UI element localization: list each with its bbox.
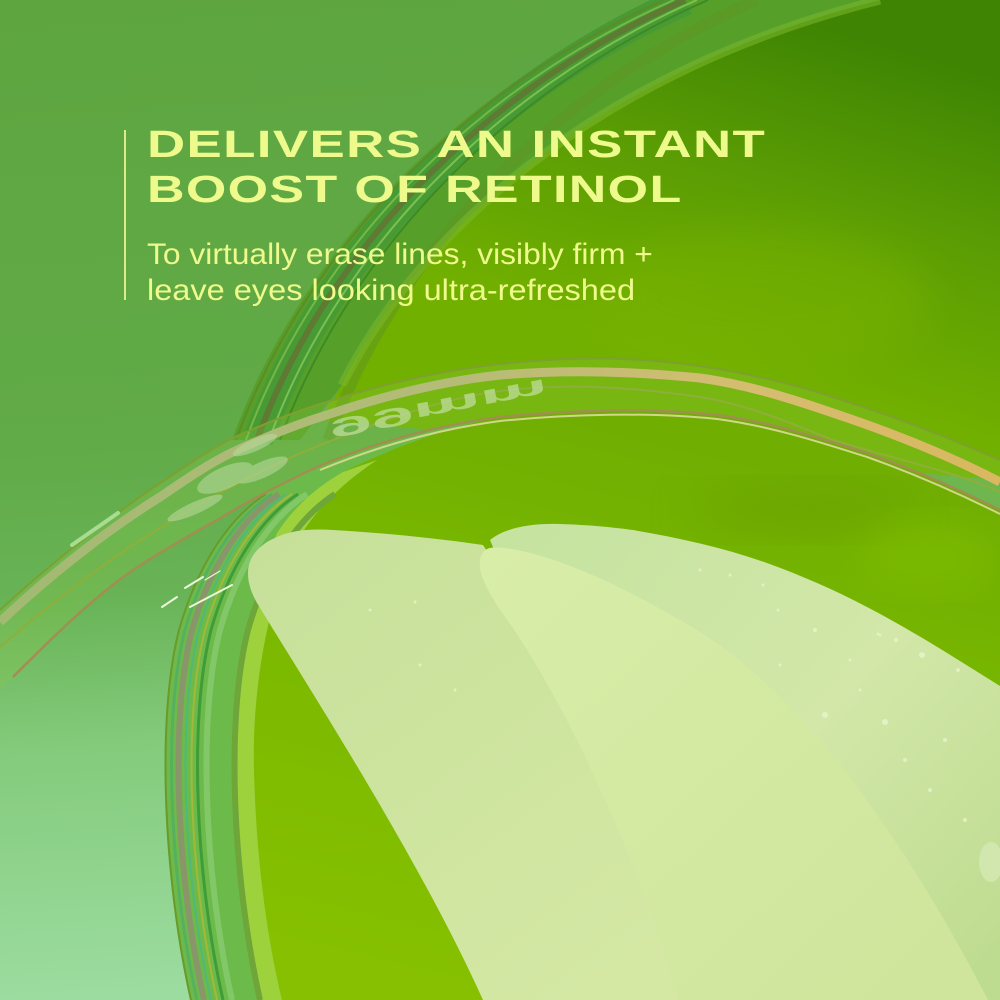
- liquid crescent: [234, 460, 377, 1000]
- rim tan band: [0, 372, 1000, 622]
- rear patch: [490, 524, 1000, 1000]
- eye patches: [248, 524, 1000, 1000]
- middle patch: [480, 547, 988, 1000]
- subheading: [147, 238, 653, 306]
- floor glow: [590, 230, 930, 370]
- rim middle line: [0, 387, 1000, 647]
- rim inner highlight: [320, 415, 1000, 514]
- floor edge highlight: [342, 0, 880, 385]
- left patch: [248, 530, 700, 1000]
- heading: [147, 124, 766, 211]
- etched marking blobs: [165, 430, 291, 526]
- back dish wall stripes: [236, 0, 756, 440]
- rim glass: [0, 358, 1000, 690]
- liquid highlight: [860, 525, 1000, 585]
- liquid shading: [690, 488, 910, 532]
- front dish wall stripes: [166, 494, 335, 1000]
- rim inner line: [13, 411, 1000, 677]
- heading: DELIVERS AN INSTANT: [147, 124, 766, 166]
- large droplet: [979, 842, 1000, 882]
- subheading: To virtually erase lines, visibly firm +: [147, 238, 653, 271]
- back dish floor: [320, 0, 1000, 480]
- back dish: [232, 0, 1000, 480]
- back dish glass wall: [232, 0, 880, 440]
- accent rule: [124, 130, 126, 300]
- heading: BOOST OF RETINOL: [147, 169, 683, 211]
- front dish: [0, 358, 1000, 1000]
- rim outer line: [0, 358, 1000, 610]
- glints: [72, 513, 232, 607]
- etched marking 99mm: 99mm: [327, 373, 551, 445]
- front dish interior glass: [165, 411, 1000, 1000]
- patch droplets: [368, 568, 967, 822]
- front dish floor liquid: [234, 411, 1000, 1000]
- subheading: leave eyes looking ultra-refreshed: [147, 274, 635, 306]
